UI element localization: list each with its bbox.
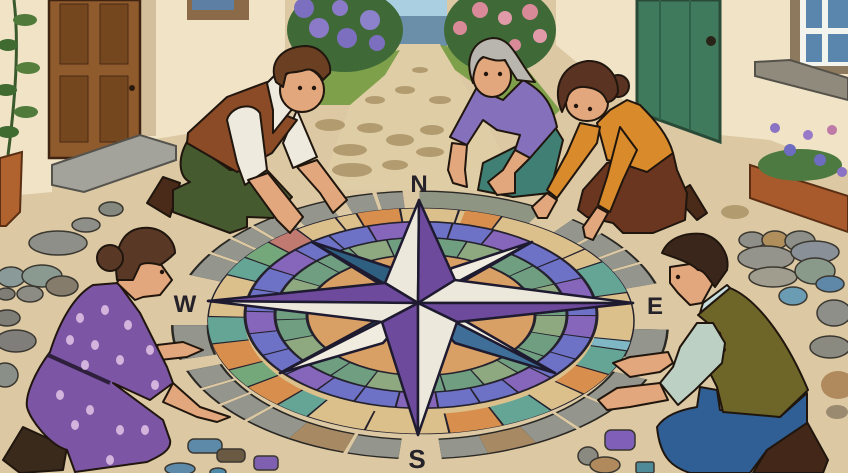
east point (418, 280, 633, 322)
house left (0, 0, 285, 226)
house right (556, 0, 848, 232)
potted plant (0, 0, 40, 226)
flower box (750, 123, 848, 232)
man in brown vest (147, 46, 347, 233)
path cobbles (315, 67, 451, 177)
compass letter E: E (647, 293, 663, 320)
compass letter N: N (410, 171, 428, 198)
scattered stones (0, 202, 848, 473)
hydrangea bush (287, 0, 403, 72)
purple ring (245, 222, 597, 408)
woman in purple dress (3, 228, 230, 473)
outer stone ring (190, 201, 650, 449)
diagonal points (280, 242, 555, 373)
man in olive vest (598, 234, 828, 473)
window (755, 0, 848, 100)
older woman in purple (448, 38, 563, 197)
compass letter W: W (174, 291, 197, 318)
west point (208, 283, 418, 322)
pink bush (444, 0, 556, 74)
door left (49, 0, 140, 158)
green door (637, 0, 720, 142)
north point (385, 200, 455, 303)
tile ring multi colour (208, 208, 634, 434)
doorstep (52, 135, 176, 192)
inner orange field (307, 255, 535, 375)
garden path background (287, 0, 560, 190)
grass (315, 50, 400, 105)
rock pile right (738, 231, 844, 305)
window top left (187, 0, 249, 20)
south point (382, 303, 457, 435)
compass star (208, 200, 633, 435)
woman in orange sweater (532, 61, 707, 240)
green ring (290, 246, 552, 384)
